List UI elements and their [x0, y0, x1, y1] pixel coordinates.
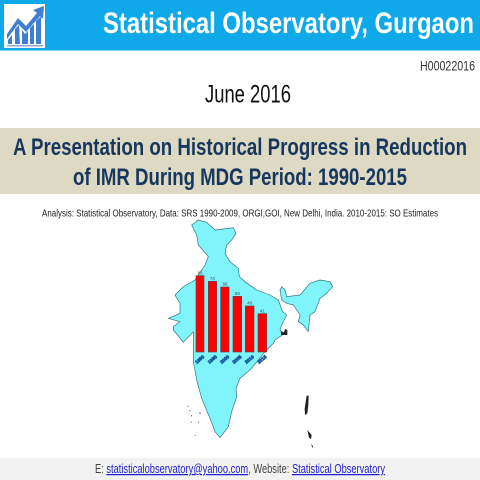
map: India: [168, 220, 333, 438]
bars: [196, 276, 267, 352]
year labels: 1990: [194, 354, 206, 365]
value labels: 58: [235, 291, 240, 296]
footer band: [0, 458, 480, 480]
year labels: 2015: [256, 354, 268, 365]
value labels: [198, 270, 265, 313]
year labels: [194, 354, 268, 365]
year labels: 2010: [244, 354, 255, 365]
header banner: [0, 0, 480, 51]
value labels: 48: [247, 301, 253, 306]
icon: rising chart logo: [4, 4, 45, 48]
year labels: 2005: [231, 354, 243, 365]
heading lines: [13, 134, 467, 191]
year labels: 1995: [207, 354, 218, 365]
value labels: 68: [223, 282, 228, 287]
year labels: 2000: [219, 354, 231, 365]
islands and dark coastal marks: [187, 329, 313, 447]
value labels: 80: [198, 270, 203, 275]
map with bar chart: [168, 220, 333, 448]
bar chart: IMR 1990-2015: [194, 270, 268, 365]
heading band: [0, 128, 480, 194]
value labels: 41: [260, 308, 265, 313]
value labels: 74: [210, 276, 215, 281]
contact line: E: statisticalobservatory@yahoo.com, Website: Statistical Observatory: [95, 462, 386, 476]
